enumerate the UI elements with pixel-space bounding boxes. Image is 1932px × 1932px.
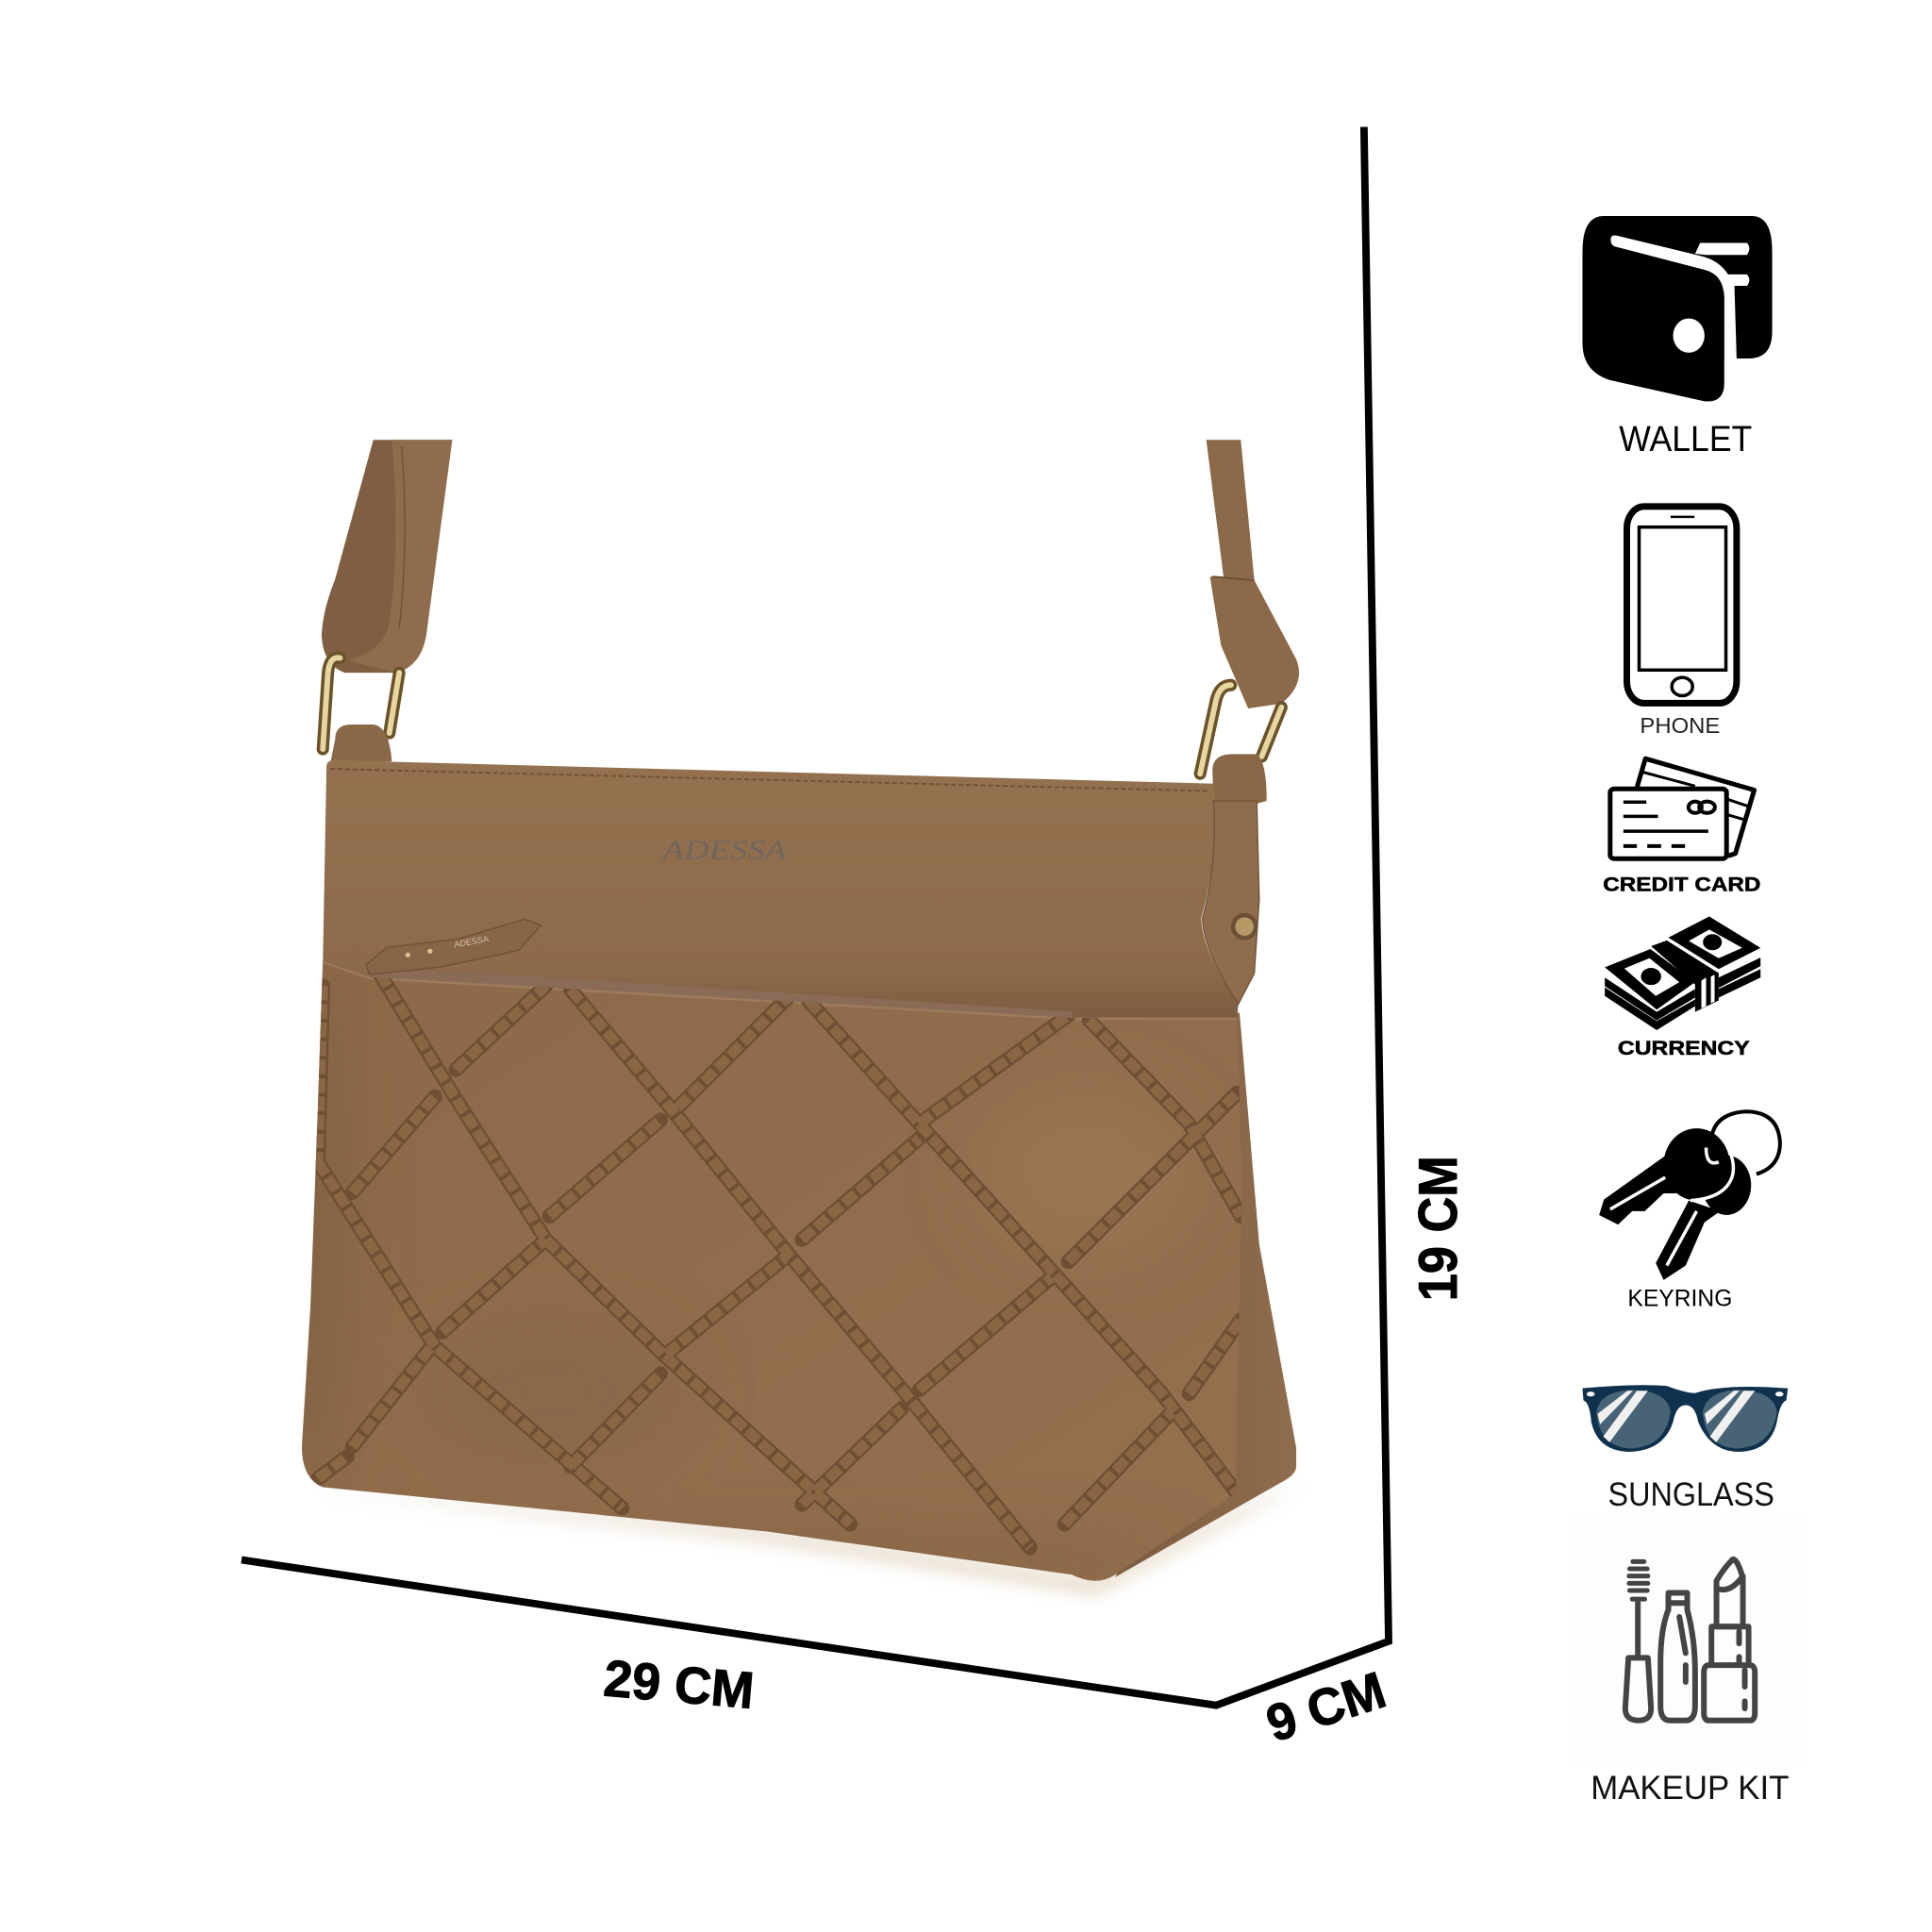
- stitched lattice: [318, 974, 1241, 1547]
- icon: sunglasses: [1582, 1385, 1788, 1452]
- label: credit card: CREDIT CARD: [1603, 874, 1760, 895]
- top panel: [323, 760, 1239, 1018]
- icon: keys: [1599, 1111, 1780, 1280]
- bag photo: [271, 440, 1301, 1592]
- zipper pull: [366, 919, 541, 974]
- gold rings: [323, 658, 1281, 774]
- icon: makeup kit: [1625, 1559, 1755, 1721]
- right strap: [1207, 440, 1299, 708]
- pocket body: [302, 961, 1242, 1581]
- rivet: [1231, 913, 1258, 941]
- right tab: [1212, 754, 1267, 816]
- gusset: [1115, 1013, 1296, 1577]
- label: wallet: WALLET: [1619, 420, 1752, 459]
- ground shadow: [308, 1484, 1301, 1592]
- label: keyring: KEYRING: [1627, 1286, 1732, 1311]
- icon: wallet: [1582, 216, 1773, 406]
- stitching: [330, 769, 1210, 791]
- icon: currency: [1605, 916, 1760, 1030]
- brand emboss: ADESSA: [660, 835, 787, 865]
- icon: phone: [1627, 507, 1737, 703]
- pocket shading: [302, 970, 1136, 1581]
- label: currency: CURRENCY: [1618, 1038, 1750, 1059]
- side flap: [1203, 801, 1259, 1004]
- label: phone: PHONE: [1640, 713, 1720, 738]
- label: height 19 CM: 19 CM: [1408, 1156, 1469, 1301]
- icon: credit card: [1610, 758, 1755, 858]
- panel: makeup tile: [1569, 1518, 1808, 1762]
- label: width 29 CM: 29 CM: [602, 1648, 757, 1720]
- left strap: [322, 440, 452, 673]
- infographic canvas: [241, 126, 1789, 1800]
- label: sunglass: SUNGLASS: [1607, 1476, 1774, 1513]
- pocket highlight: [323, 962, 1237, 1019]
- label: makeup kit: MAKEUP KIT: [1591, 1770, 1789, 1807]
- zipper tag mark: ADESSA: [454, 934, 491, 949]
- dimension lines: [242, 127, 1389, 1706]
- left tab: [330, 724, 391, 764]
- label: depth 9 CM: 9 CM: [1259, 1660, 1392, 1753]
- zip tape: [370, 971, 1072, 1018]
